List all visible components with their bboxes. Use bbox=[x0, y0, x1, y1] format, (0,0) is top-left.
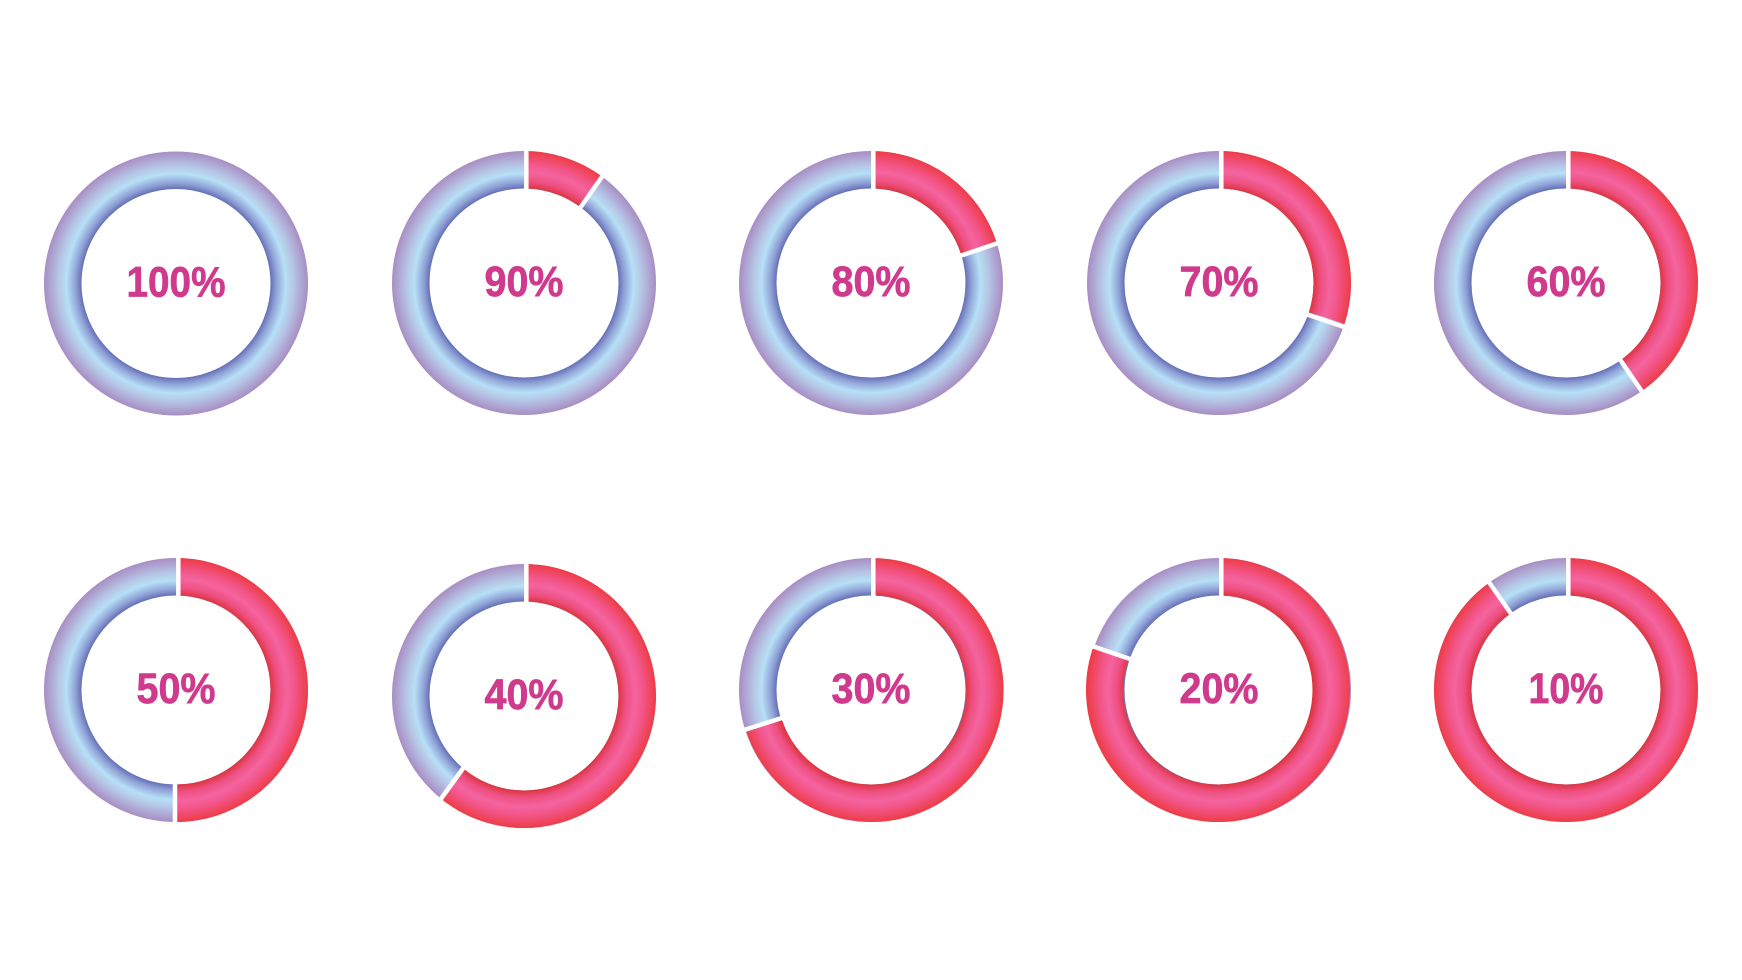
ring track bbox=[63, 170, 289, 397]
ring track bbox=[1453, 577, 1679, 803]
red arc segment bbox=[1219, 170, 1332, 318]
ring track bbox=[1106, 577, 1332, 803]
ring track bbox=[63, 577, 289, 803]
segment separators bbox=[873, 147, 1001, 257]
donut: 90% bbox=[411, 147, 637, 396]
segment separators bbox=[1486, 554, 1568, 618]
red arc segment bbox=[763, 577, 985, 803]
donut: 40% bbox=[411, 560, 637, 809]
segment separators bbox=[438, 560, 526, 803]
red arc segment bbox=[871, 170, 979, 248]
segment separators bbox=[1221, 147, 1347, 328]
red arc segment bbox=[452, 583, 637, 809]
segment separators bbox=[526, 147, 606, 211]
donut: 50% bbox=[63, 554, 289, 826]
label: 10%: 10% bbox=[1528, 665, 1604, 713]
donut: 10% bbox=[1453, 554, 1679, 803]
donut: 30% bbox=[741, 554, 985, 803]
ring track bbox=[1453, 170, 1679, 396]
ring track bbox=[758, 170, 984, 396]
donut: 70% bbox=[1106, 147, 1347, 396]
ring track bbox=[1106, 170, 1332, 396]
label: 100%: 100% bbox=[126, 258, 226, 306]
label: 90%: 90% bbox=[484, 258, 564, 306]
label: 20%: 20% bbox=[1180, 665, 1258, 713]
red arc segment bbox=[524, 170, 591, 191]
segment separators bbox=[1089, 554, 1221, 660]
donut: 60% bbox=[1453, 147, 1679, 396]
label: 40%: 40% bbox=[484, 671, 564, 719]
red arc segment bbox=[1105, 577, 1331, 803]
ring track bbox=[411, 583, 637, 809]
label: 70%: 70% bbox=[1180, 258, 1258, 306]
red arc segment bbox=[1453, 577, 1679, 803]
segment separators bbox=[1568, 147, 1645, 396]
donut: 100% bbox=[63, 170, 289, 397]
red arc segment bbox=[176, 577, 289, 803]
segment separators bbox=[741, 554, 873, 731]
label: 30%: 30% bbox=[832, 665, 910, 713]
segment separators bbox=[175, 554, 178, 826]
ring track bbox=[758, 577, 984, 803]
red arc segment bbox=[1566, 170, 1679, 375]
ring track bbox=[411, 170, 637, 396]
donut: 80% bbox=[758, 147, 1001, 396]
donut: 20% bbox=[1089, 554, 1332, 803]
label: 80%: 80% bbox=[832, 258, 910, 306]
label: 50%: 50% bbox=[136, 665, 216, 713]
label: 60%: 60% bbox=[1526, 258, 1606, 306]
